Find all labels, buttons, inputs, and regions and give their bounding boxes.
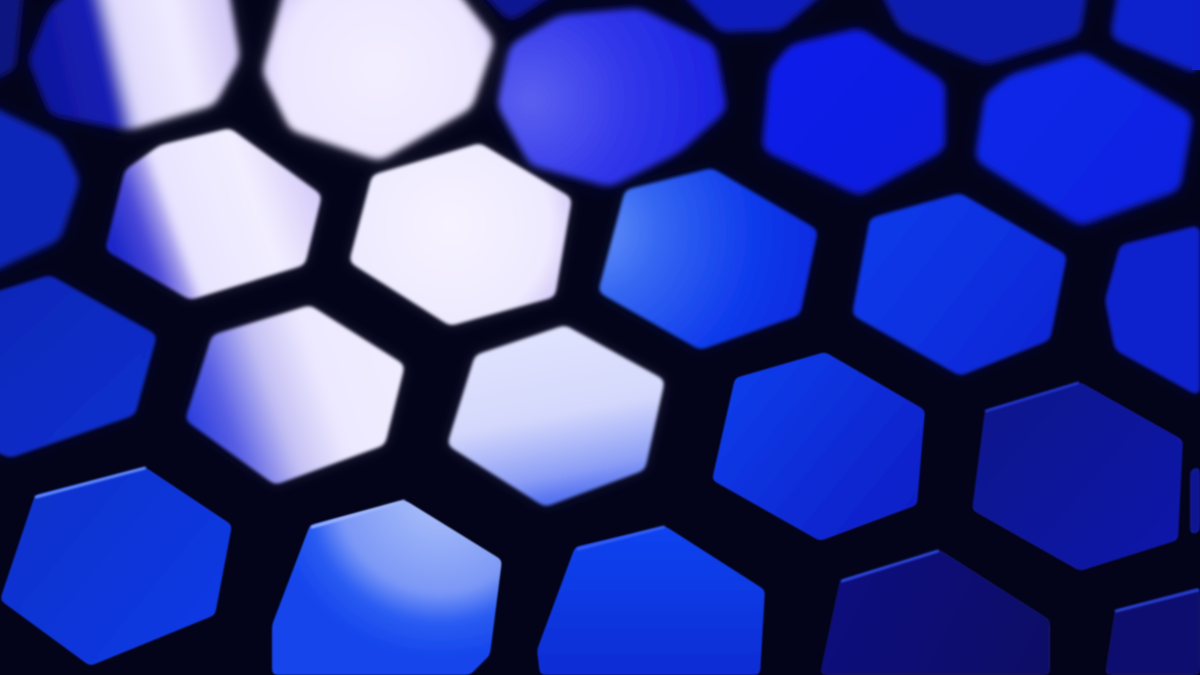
cell: top bright xyxy=(262,0,495,161)
cell: top strip middle xyxy=(660,0,850,32)
cell: bottom centre xyxy=(537,526,765,675)
cell: second row light blue xyxy=(598,168,818,350)
cell: top right corner xyxy=(1110,0,1200,75)
top row cells, out of focus xyxy=(0,0,1200,282)
cell: bottom left xyxy=(0,467,232,666)
cell: third row pale xyxy=(447,325,665,507)
highlight: bottom left cell xyxy=(36,468,145,497)
cell: second row blue xyxy=(852,193,1067,376)
cell: second row far left xyxy=(0,96,80,282)
cell: top centre xyxy=(497,8,727,187)
bright edge highlights on lower cells xyxy=(36,383,1198,611)
cell: third row dark xyxy=(972,382,1183,571)
highlight: third row dark cell xyxy=(986,383,1078,411)
highlight: bottom centre cell xyxy=(578,527,664,549)
middle row cells xyxy=(0,128,1200,507)
cell: bottom lit xyxy=(272,500,502,675)
highlight: bottom dark cell xyxy=(842,551,938,581)
cell: third row lit xyxy=(185,305,405,485)
cell: top edge left xyxy=(0,0,25,90)
cell: top strip left xyxy=(460,0,590,22)
cell: bottom right xyxy=(1105,587,1200,675)
cell: second row brightest xyxy=(349,143,572,326)
cell: third row blue xyxy=(712,352,925,541)
cell: right edge sliver xyxy=(1190,466,1200,535)
cell: second row right xyxy=(1105,225,1200,397)
cell: second row lit xyxy=(105,128,322,300)
cell: top right A xyxy=(762,28,945,196)
highlight: bottom right cell xyxy=(1116,590,1198,611)
cell: third row far left xyxy=(0,275,157,458)
cell: bottom dark xyxy=(820,550,1050,675)
highlight: bottom lit cell xyxy=(312,501,404,527)
cell: top strip right xyxy=(870,0,1090,65)
cell: top left part-lit xyxy=(28,0,240,130)
edge strip keeping the corner cell solid at the frame edge xyxy=(1192,0,1200,70)
lower cells, in sharper focus xyxy=(0,352,1200,675)
cell: top right B xyxy=(975,52,1193,226)
